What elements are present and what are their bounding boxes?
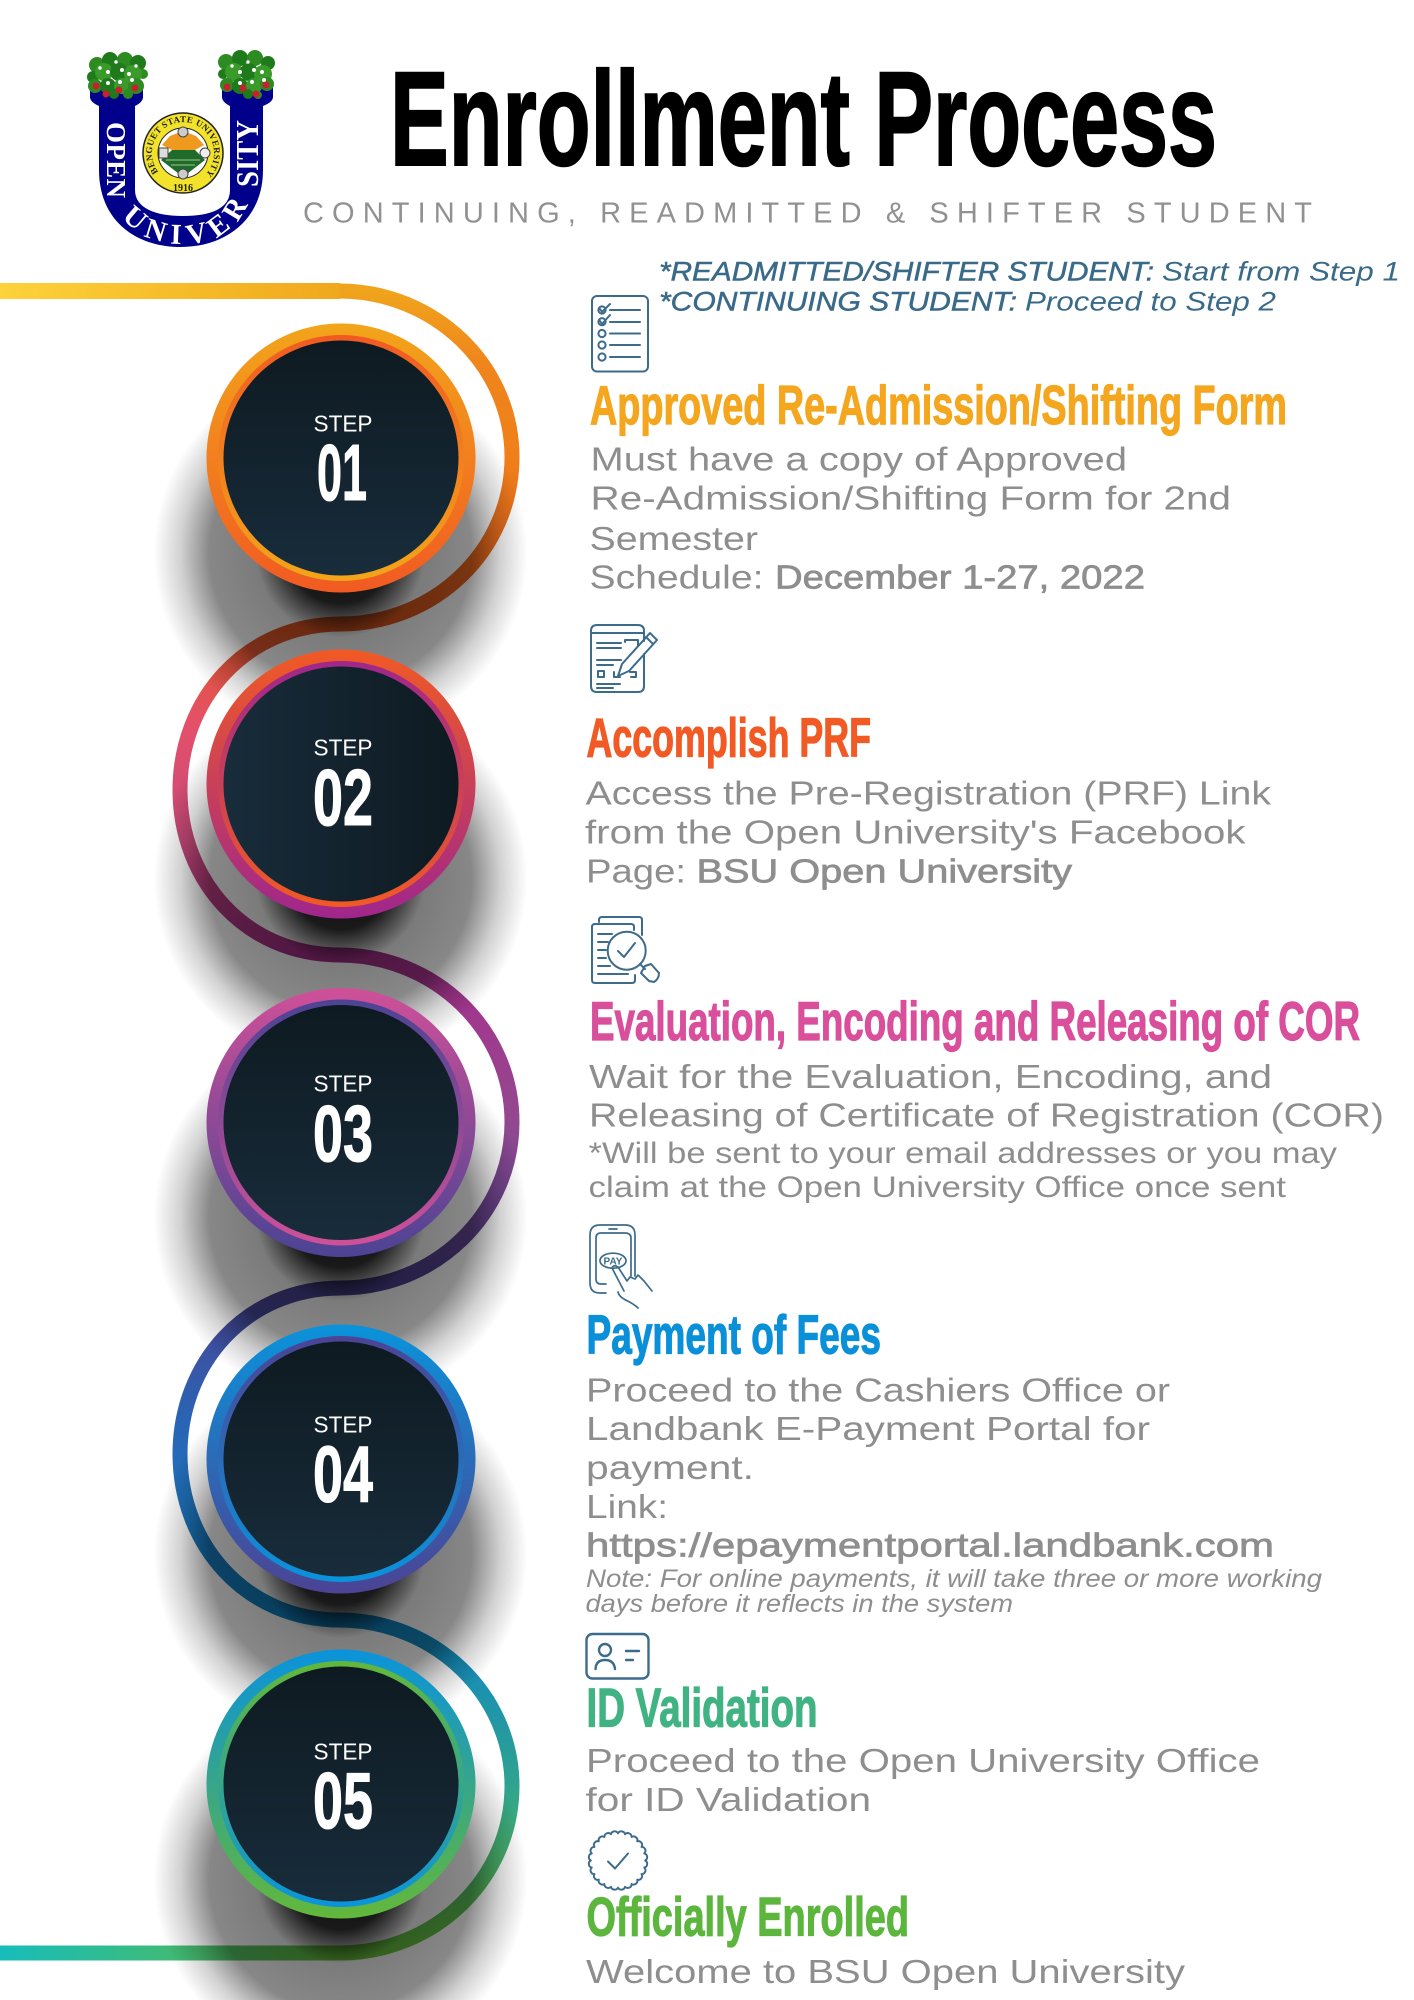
body: accomplish PRF: Page: (586, 852, 686, 890)
note: readmitted and continuing students (659, 256, 1400, 316)
body: ID validation (586, 1742, 1260, 1818)
body: payment: Note: For online payments, it will take three or more working (586, 1565, 1322, 1593)
step 04 badge (206, 1324, 476, 1594)
drop shadows under step circles (154, 366, 528, 2000)
step 05 badge: 05 (313, 1756, 373, 1845)
note: readmitted and continuing students: *CONTINUING STUDENT: (659, 286, 1017, 316)
icon: ID card (586, 1634, 648, 1678)
logo lettering (101, 120, 265, 244)
body: ID validation: Proceed to the Open University Office (586, 1742, 1260, 1779)
logo seal: 1916 (173, 183, 193, 194)
logo: Open University (87, 50, 275, 247)
body: ID validation: for ID Validation (586, 1781, 871, 1818)
label: PAY in icon: PAY (604, 1256, 623, 1268)
body: approved form: Semester (590, 520, 758, 557)
block: approved form (590, 374, 1287, 596)
logo U shape (90, 87, 273, 247)
note: readmitted and continuing students: Proceed to Step 2 (1025, 286, 1276, 316)
subtitle: CONTINUING, READMITTED & SHIFTER STUDENT (303, 198, 1312, 230)
body: payment: Landbank E-Payment Portal for (586, 1410, 1150, 1447)
note: readmitted and continuing students: *READMITTED/SHIFTER STUDENT: (659, 256, 1154, 286)
body: evaluation: Wait for the Evaluation, Encoding, and (589, 1058, 1272, 1095)
block: accomplish PRF (585, 706, 1272, 890)
logo right plant (218, 50, 275, 99)
body: payment: Proceed to the Cashiers Office or (586, 1372, 1170, 1408)
block: payment of fees (586, 1304, 1322, 1618)
body: approved form: Must have a copy of Approved (590, 440, 1127, 478)
body: payment (586, 1372, 1322, 1618)
body: accomplish PRF: Access the Pre-Registration (PRF) Link (586, 774, 1272, 812)
step 01 badge: STEP (314, 410, 372, 436)
step 02 badge (206, 650, 476, 918)
body: accomplish PRF: BSU Open University (696, 852, 1073, 890)
heading: officially enrolled: Officially Enrolled (586, 1886, 909, 1948)
step 02 badge: STEP (314, 734, 372, 760)
step 03 badge (206, 988, 476, 1257)
body: payment: payment. (586, 1449, 754, 1486)
logo lettering: SITY (229, 120, 265, 187)
icon: phone pay (590, 1225, 652, 1308)
body: evaluation: Releasing of Certificate of Registration (COR) (589, 1096, 1384, 1134)
body: approved form: Schedule: (590, 558, 764, 596)
body: approved form: December 1-27, 2022 (775, 558, 1145, 596)
body: accomplish PRF (585, 774, 1272, 890)
body: payment: https://epaymentportal.landbank.com (586, 1526, 1274, 1564)
body: payment: days before it reflects in the system (586, 1590, 1013, 1618)
step 01 badge (206, 324, 476, 592)
step 04 badge: STEP (314, 1412, 372, 1438)
body: accomplish PRF: from the Open University's Facebook (585, 814, 1246, 850)
icon: form with pencil (591, 625, 657, 692)
heading: ID validation: ID Validation (586, 1676, 818, 1738)
body: evaluation (588, 1058, 1384, 1204)
body: evaluation: *Will be sent to your email addresses or you may (588, 1137, 1337, 1170)
block: ID validation (586, 1676, 1260, 1818)
winding timeline ribbon (0, 291, 512, 1953)
step 01 badge: 01 (317, 428, 367, 517)
step 05 badge: STEP (314, 1738, 372, 1764)
step 04 badge: 04 (313, 1430, 373, 1518)
body: payment: Link: (586, 1488, 668, 1525)
icon: checklist (592, 296, 648, 372)
icon: document with magnifier (592, 917, 659, 983)
step 03 badge: 03 (313, 1089, 373, 1178)
logo lettering: OPEN (101, 122, 131, 198)
logo seal: BENGUET STATE UNIVERSITY (146, 116, 220, 178)
heading: accomplish PRF: Accomplish PRF (586, 706, 871, 768)
body: evaluation: claim at the Open University Office once sent (588, 1171, 1286, 1204)
block: officially enrolled (586, 1886, 1186, 1990)
note: readmitted and continuing students: Start from Step 1 (1162, 256, 1400, 286)
heading: payment: Payment of Fees (586, 1304, 881, 1366)
step 03 badge: STEP (314, 1070, 372, 1096)
block: evaluation (588, 990, 1384, 1204)
body: approved form (590, 440, 1231, 596)
body: officially enrolled: Welcome to BSU Open University (586, 1953, 1186, 1990)
body: approved form: Re-Admission/Shifting Form for 2nd (590, 480, 1231, 516)
logo lettering: UNIVER (126, 200, 248, 244)
logo left plant (87, 52, 148, 99)
step 02 badge: 02 (313, 753, 373, 842)
step 05 badge (206, 1650, 476, 1918)
icon: verified badge (589, 1831, 647, 1890)
